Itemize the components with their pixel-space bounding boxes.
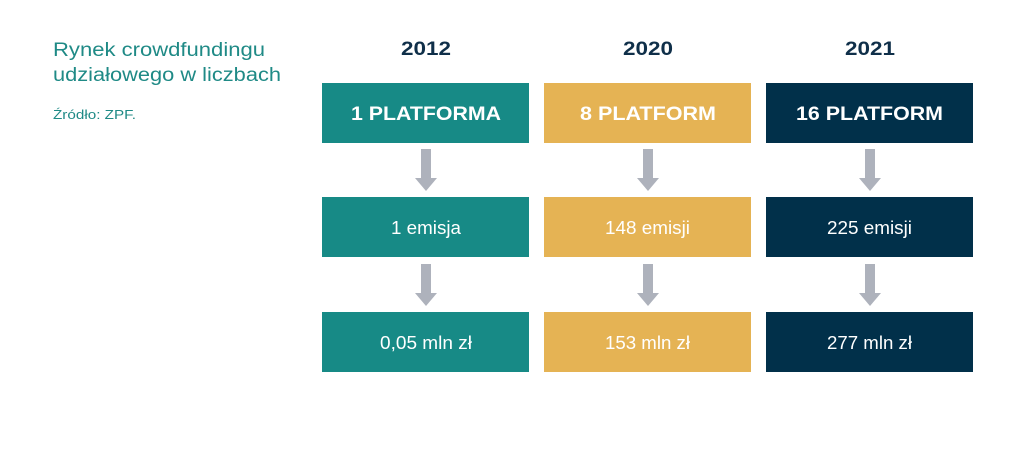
box: 16 platform: [766, 83, 973, 143]
column: 2021: [766, 39, 973, 372]
box: 148 emisji: 148 emisji: [605, 218, 690, 238]
year 2012: 2012: [401, 39, 451, 60]
box: 148 emisji: [544, 197, 751, 257]
box: 277 mln zł: [766, 312, 973, 372]
box: 8 platform: [544, 83, 751, 143]
title: udziałowego w liczbach: [53, 65, 281, 86]
box: 1 emisja: 1 emisja: [391, 218, 462, 238]
box: 277 mln zł: 277 mln zł: [827, 333, 912, 353]
year 2021: 2021: [845, 39, 895, 60]
title: Rynek crowdfundingu: [53, 40, 265, 61]
year 2020: 2020: [623, 39, 673, 60]
box: 0,05 mln zł: [322, 312, 529, 372]
box: 1 emisja: [322, 197, 529, 257]
arrow: [859, 264, 881, 306]
box: 1 platforma: [322, 83, 529, 143]
box: 8 platform: 8 PLATFORM: [580, 104, 716, 125]
box: 0,05 mln zł: 0,05 mln zł: [380, 333, 472, 353]
arrow: [637, 264, 659, 306]
box: 153 mln zł: [544, 312, 751, 372]
box: 225 emisji: 225 emisji: [827, 218, 912, 238]
box: 225 emisji: [766, 197, 973, 257]
arrow: [415, 149, 437, 191]
box: 1 platforma: 1 PLATFORMA: [351, 104, 501, 125]
source note: Źródło: ZPF.: [53, 107, 136, 122]
arrow: [415, 264, 437, 306]
column: 2012: [322, 39, 529, 372]
arrow: [859, 149, 881, 191]
arrow: [637, 149, 659, 191]
box: 16 platform: 16 PLATFORM: [796, 104, 943, 125]
column: 2020: [544, 39, 751, 372]
title: [53, 40, 281, 86]
box: 153 mln zł: 153 mln zł: [605, 333, 690, 353]
